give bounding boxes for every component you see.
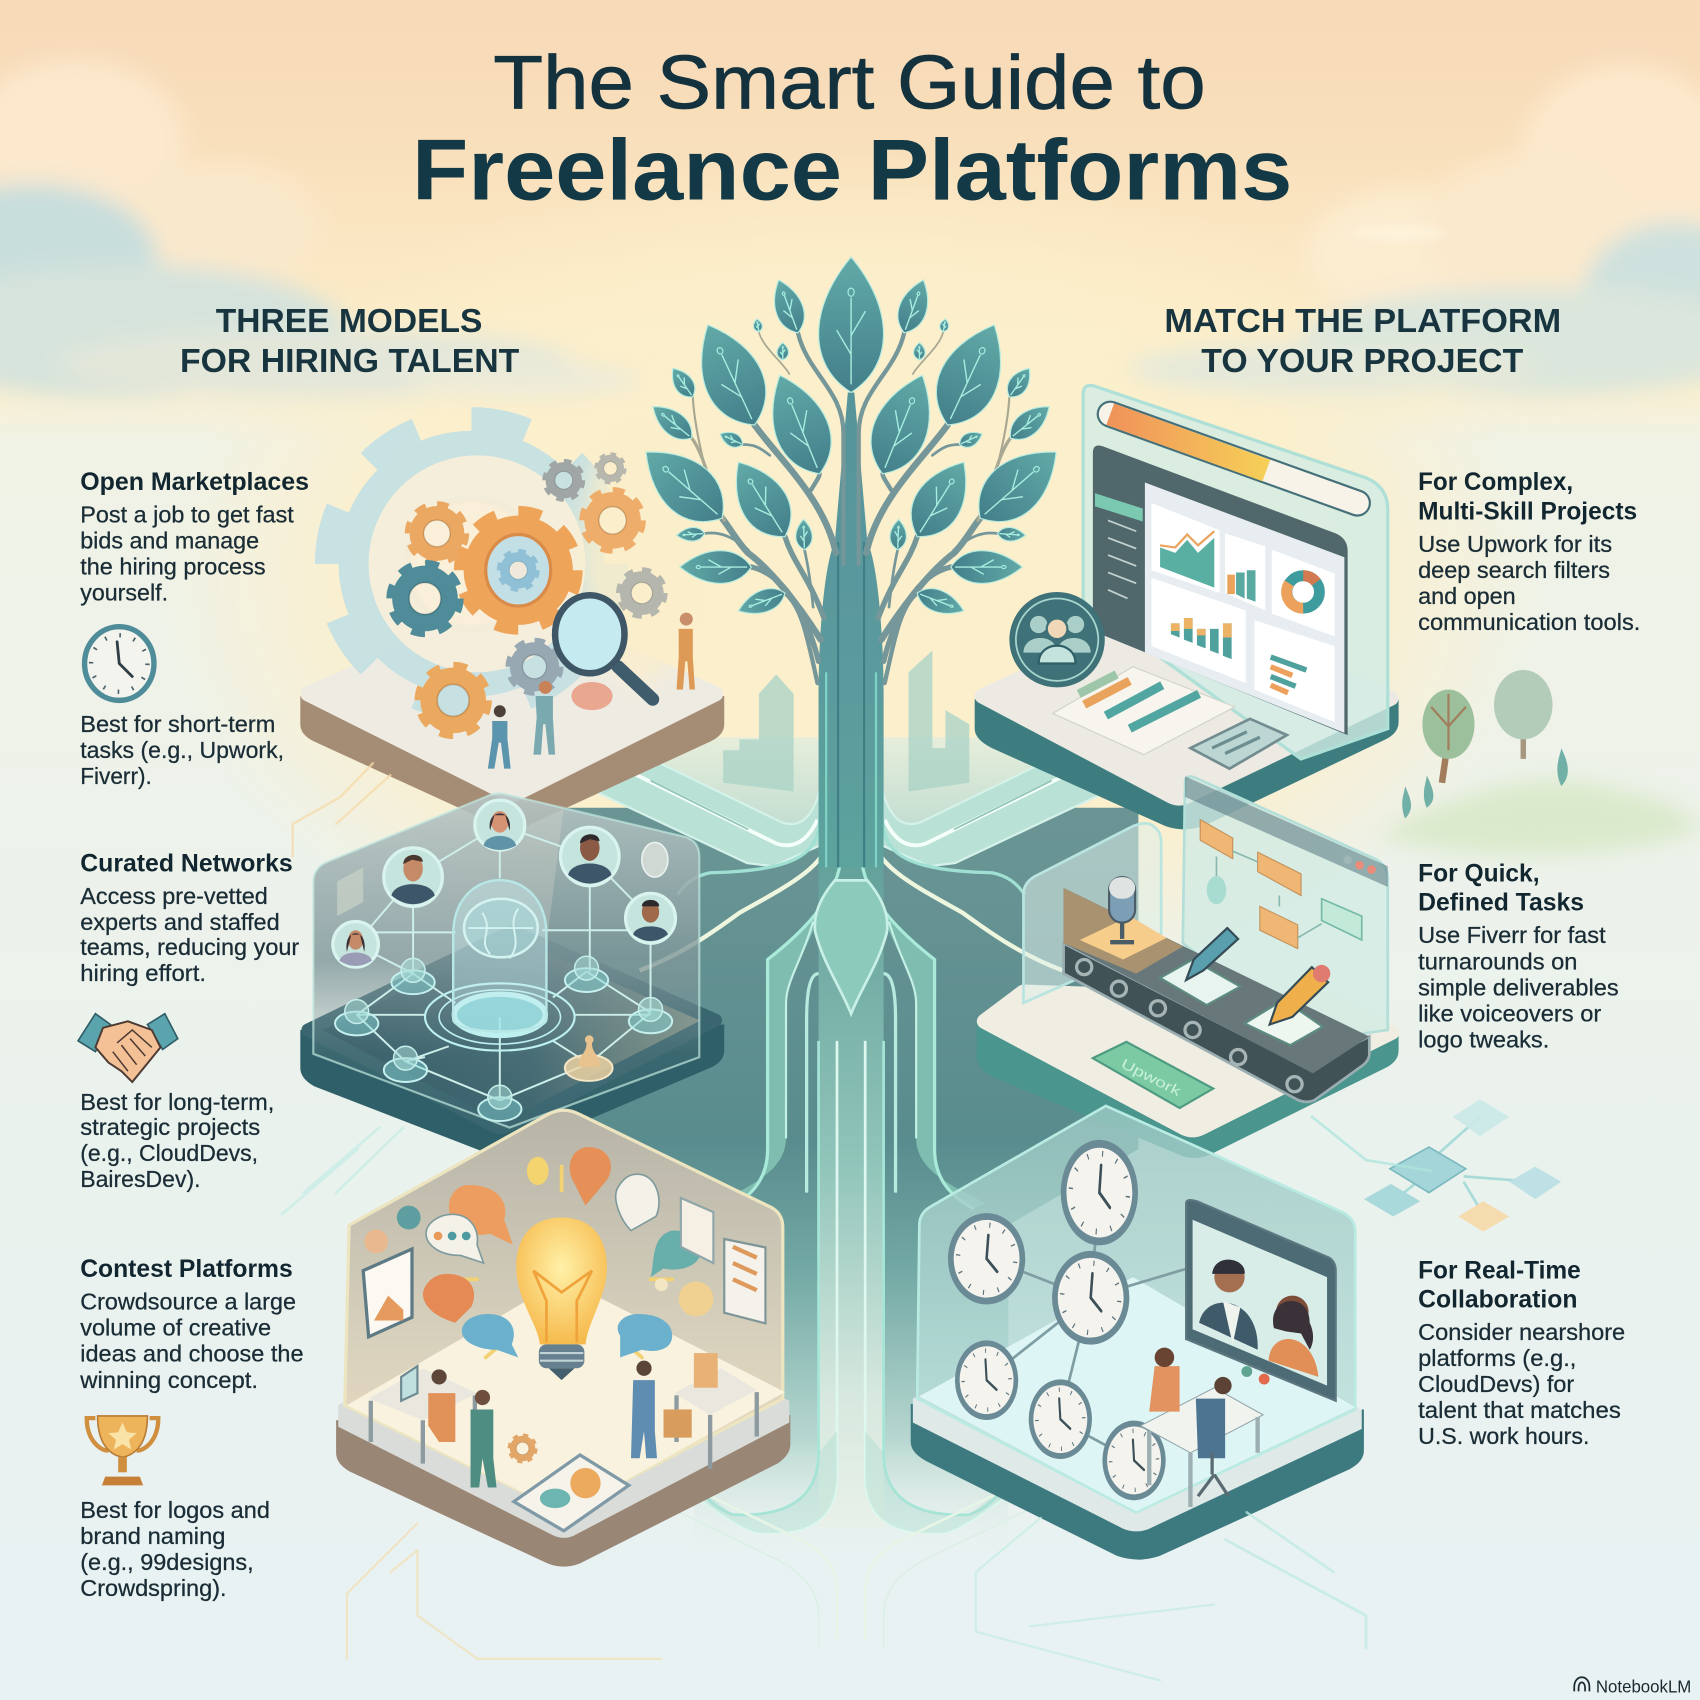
desks and workers <box>369 1353 757 1488</box>
text block: open marketplaces: the hiring process <box>80 554 266 580</box>
text block: contest platforms: Contest Platforms <box>80 1255 293 1283</box>
right glass panel <box>1183 777 1388 1041</box>
magnifying glass <box>555 595 653 699</box>
circuit lines around panels <box>282 763 1431 1680</box>
dark platform surface <box>308 932 716 1128</box>
dark platform side <box>300 1025 724 1155</box>
base <box>336 1415 790 1567</box>
background: left clouds <box>0 60 640 398</box>
heading: match the platform: MATCH THE PLATFORM <box>1164 303 1561 340</box>
text block: open marketplaces: bids and manage <box>80 528 259 554</box>
panel: open marketplaces gear platform <box>300 423 724 829</box>
text block: real-time collaboration: Consider nearshore <box>1418 1319 1625 1345</box>
green sign: Upwork <box>1119 1055 1185 1100</box>
text block: contest platforms best for: Crowdspring). <box>80 1575 227 1601</box>
light rays <box>455 1167 672 1357</box>
network lines <box>356 825 651 1100</box>
text block: quick tasks: Use Fiverr for fast <box>1418 922 1606 948</box>
glass dome with brain <box>453 880 546 1031</box>
gear and tablet on floor <box>510 1435 629 1531</box>
expert portraits <box>333 800 675 967</box>
text block: contest platforms best for: (e.g., 99designs, <box>80 1549 254 1575</box>
brain nodes <box>335 956 672 1121</box>
heading: match the platform: TO YOUR PROJECT <box>1201 343 1524 380</box>
video call screen <box>1186 1200 1336 1401</box>
glass back panel <box>313 793 699 1128</box>
text block: curated networks best for <box>80 1089 274 1192</box>
background: central root column <box>819 857 884 1529</box>
text block: complex projects: and open <box>1418 583 1516 609</box>
text block: open marketplaces <box>80 468 309 606</box>
text block: contest platforms best for: brand naming <box>80 1523 226 1549</box>
dashboard charts <box>1151 503 1335 722</box>
roots: right flowing bands <box>862 750 1103 1648</box>
title <box>412 40 1292 218</box>
text block: quick tasks <box>1418 859 1619 1052</box>
platform surface <box>984 992 1392 1130</box>
text block: curated networks best for: (e.g., CloudDevs, <box>80 1140 258 1166</box>
microphone on tile <box>1080 877 1167 960</box>
icon: team circle <box>1009 592 1105 687</box>
screen frame <box>1093 445 1348 735</box>
floor <box>919 1277 1355 1511</box>
platform surface <box>308 605 716 794</box>
small gears <box>391 454 664 734</box>
green sign <box>1093 1042 1213 1108</box>
heading: three models <box>180 303 520 380</box>
text block: open marketplaces: Post a job to get fast <box>80 502 294 528</box>
panel: curated networks platform <box>300 793 724 1155</box>
heading: three models: FOR HIRING TALENT <box>180 343 520 380</box>
text block: curated networks: Access pre-vetted <box>80 883 268 909</box>
text block: curated networks <box>80 850 299 986</box>
text block: quick tasks: Defined Tasks <box>1418 889 1584 917</box>
heading: match the platform <box>1164 303 1561 380</box>
task cards with pens <box>1160 928 1330 1045</box>
background: warm central glow <box>157 152 1545 1019</box>
text block: real-time collaboration: platforms (e.g., <box>1418 1345 1576 1371</box>
text block: contest platforms: winning concept. <box>79 1367 258 1393</box>
background: right clouds <box>1128 65 1700 396</box>
clock connector lines <box>987 1193 1187 1460</box>
text block: real-time collaboration: For Real-Time <box>1418 1256 1581 1284</box>
left glass arch <box>1023 823 1161 1003</box>
tree: left branches and leaves <box>628 275 844 683</box>
floor <box>347 1279 785 1514</box>
glass wall <box>345 1110 783 1512</box>
phone device <box>1190 719 1287 769</box>
speech bubbles <box>364 1147 713 1357</box>
text block: real-time collaboration: U.S. work hours. <box>1418 1423 1589 1449</box>
rim <box>338 1296 789 1538</box>
text block: quick tasks: like voiceovers or <box>1418 1000 1602 1026</box>
panel: contest platforms hexagon <box>336 1110 790 1567</box>
text block: curated networks: Curated Networks <box>80 850 293 878</box>
platform base <box>300 696 724 829</box>
background: small cloud wisp <box>1353 224 1444 242</box>
text block: open marketplaces best for: Fiverr). <box>80 763 152 789</box>
panel: complex projects dashboard platform <box>975 385 1399 829</box>
title: The Smart Guide to <box>493 40 1206 125</box>
inset card on glass <box>337 867 363 916</box>
glass wall <box>917 1106 1355 1512</box>
text block: curated networks: hiring effort. <box>80 960 206 986</box>
text block: open marketplaces best for: tasks (e.g., Upwork, <box>80 737 284 763</box>
text block: curated networks: teams, reducing your <box>80 934 299 960</box>
platform side <box>977 1023 1399 1158</box>
text block: complex projects: communication tools. <box>1418 609 1640 635</box>
text block: quick tasks: turnarounds on <box>1418 948 1577 974</box>
report card on platform <box>1053 667 1235 755</box>
glass panel <box>1083 385 1388 759</box>
text block: contest platforms: ideas and choose the <box>80 1341 304 1367</box>
icon: clock <box>85 627 154 700</box>
desk with two workers <box>1141 1348 1263 1507</box>
text block: open marketplaces best for: Best for short-term <box>80 711 275 737</box>
text block: contest platforms: Crowdsource a large <box>80 1289 296 1315</box>
flowchart boxes <box>1200 820 1376 949</box>
text block: quick tasks: For Quick, <box>1418 859 1540 887</box>
panel title bar <box>1185 776 1388 887</box>
rim <box>913 1290 1362 1531</box>
tree: central trunk <box>815 392 887 1409</box>
background: pale city plaza <box>640 737 1062 835</box>
heading: three models: THREE MODELS <box>216 303 482 340</box>
translucent big gear <box>335 428 608 700</box>
tree: right branches and leaves <box>858 275 1074 683</box>
roots: left flowing bands <box>600 750 840 1648</box>
panel: small network diagram right <box>1364 1099 1561 1232</box>
progress bar <box>1110 414 1357 503</box>
platform side <box>975 699 1399 829</box>
text block: complex projects <box>1418 468 1640 635</box>
text block: open marketplaces best for <box>80 711 284 789</box>
light bulb <box>516 1218 607 1380</box>
title: Freelance Platforms <box>412 121 1292 218</box>
clocks <box>948 1140 1165 1500</box>
saplings on hill <box>1377 670 1700 855</box>
text block: contest platforms <box>79 1255 304 1393</box>
text block: open marketplaces: yourself. <box>80 580 168 606</box>
icon: trophy <box>87 1416 158 1485</box>
text block: open marketplaces: Open Marketplaces <box>80 468 309 496</box>
background: city silhouettes <box>723 651 969 791</box>
gear fade on the right <box>580 423 699 683</box>
text block: complex projects: For Complex, <box>1418 468 1573 496</box>
text block: quick tasks: logo tweaks. <box>1418 1026 1549 1052</box>
text block: real-time collaboration: CloudDevs) for <box>1418 1371 1574 1397</box>
text block: contest platforms best for <box>80 1497 270 1601</box>
text block: contest platforms: volume of creative <box>80 1315 271 1341</box>
text block: contest platforms best for: Best for logos and <box>80 1497 270 1523</box>
tree: top central leaf <box>819 257 884 392</box>
text block: curated networks best for: strategic projects <box>80 1114 260 1140</box>
target rings <box>425 983 575 1051</box>
people figures <box>488 613 695 769</box>
panel: real-time collaboration hexagon <box>911 1106 1364 1560</box>
text block: curated networks best for: Best for long-term, <box>80 1089 274 1115</box>
text block: complex projects: Multi-Skill Projects <box>1418 497 1637 525</box>
icon: handshake <box>78 1014 178 1082</box>
text block: complex projects: deep search filters <box>1418 557 1610 583</box>
background: dark channel field <box>520 808 1138 1550</box>
text block: real-time collaboration <box>1418 1256 1625 1449</box>
text block: complex projects: Use Upwork for its <box>1418 531 1612 557</box>
text block: curated networks: experts and staffed <box>80 909 280 935</box>
conveyor belt <box>1064 888 1369 1102</box>
text block: real-time collaboration: Collaboration <box>1418 1286 1577 1314</box>
panel: quick tasks conveyor platform <box>977 776 1399 1158</box>
large orange gear <box>462 514 574 626</box>
chart screens <box>363 1198 765 1337</box>
text block: curated networks best for: BairesDev). <box>80 1166 201 1192</box>
text block: quick tasks: simple deliverables <box>1418 974 1619 1000</box>
base <box>911 1404 1364 1560</box>
platform surface <box>982 607 1391 798</box>
text block: real-time collaboration: talent that matches <box>1418 1397 1621 1423</box>
watermark: NotebookLM: NotebookLM <box>1596 1676 1691 1696</box>
brain figure <box>571 682 613 710</box>
gear inner glow <box>369 455 585 672</box>
